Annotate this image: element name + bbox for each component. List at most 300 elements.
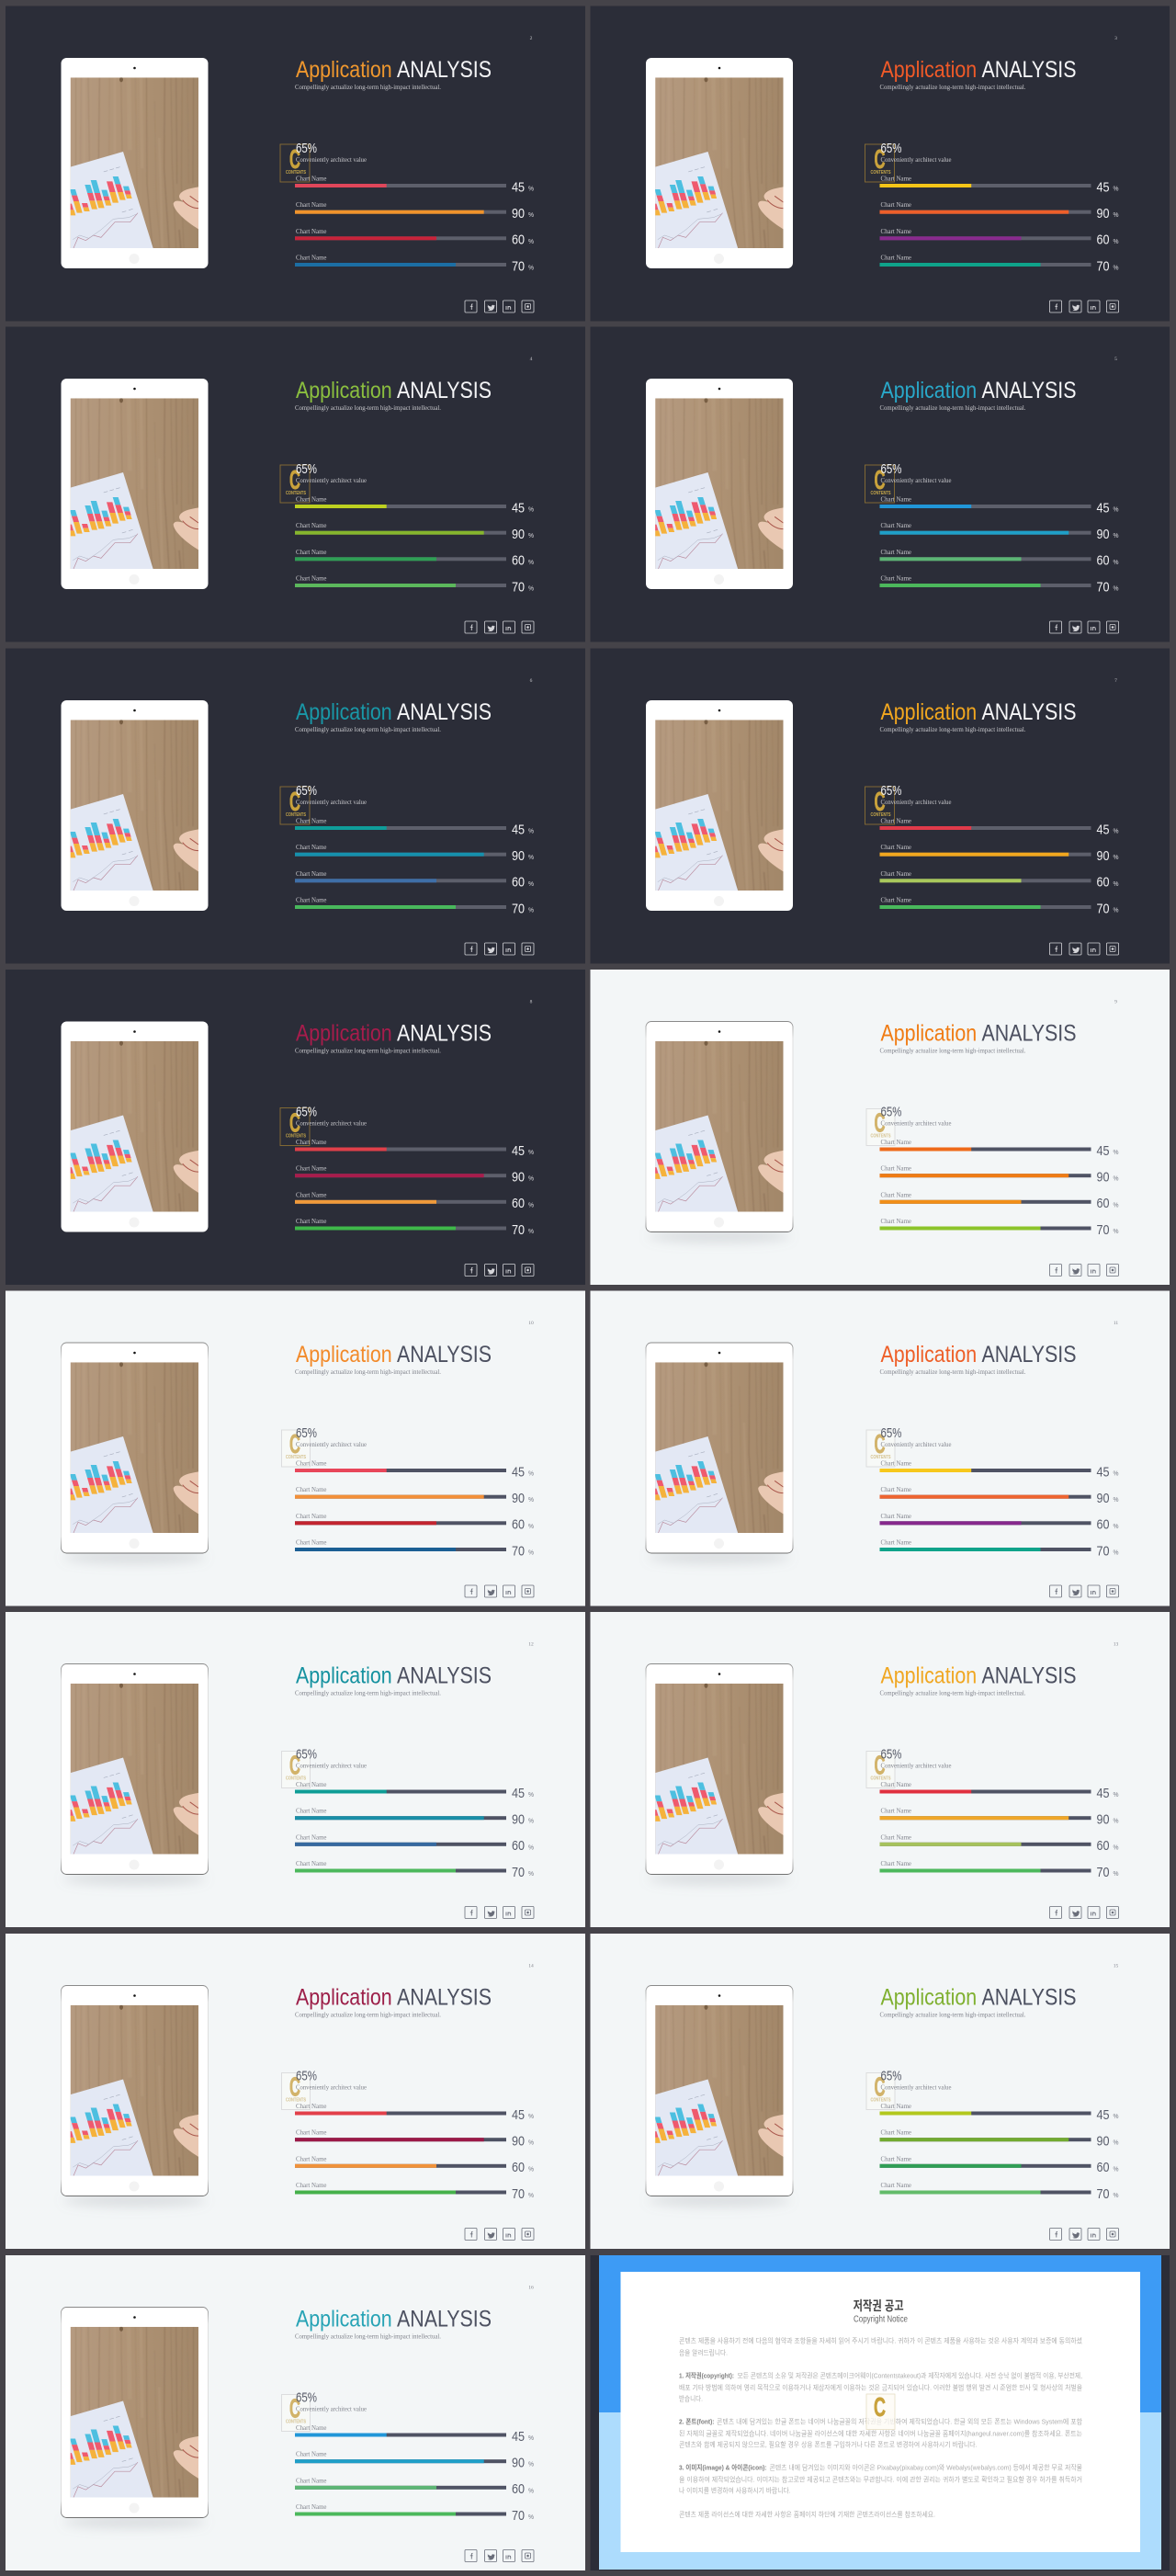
bar 90 [295, 1164, 534, 1186]
bar 90 [880, 843, 1119, 864]
subtitle: Compellingly actualize long-term high-impact intellectual. [880, 725, 1026, 733]
social icons [465, 621, 534, 633]
bar 60: 60 [1097, 553, 1110, 569]
bar chart [880, 1780, 1119, 1880]
bar 90: Chart Name [880, 521, 912, 529]
stat 65%: Conveniently architect value [296, 2082, 368, 2092]
tablet with photo [646, 58, 793, 268]
bar 90: % [1114, 1497, 1119, 1504]
paragraph: image and icon [679, 2463, 1082, 2495]
bar 60: Chart Name [880, 548, 912, 556]
bar 70 [295, 1859, 534, 1880]
bar chart [880, 2102, 1119, 2202]
bar chart [295, 494, 534, 595]
bar 60: Chart Name [296, 2476, 327, 2484]
bar 90: Chart Name [880, 1485, 912, 1493]
bar 90 [295, 2450, 534, 2470]
social icons [1049, 621, 1119, 633]
bar 60: Chart Name [296, 1833, 327, 1841]
bar 45: 45 [1097, 2107, 1110, 2123]
social icons [465, 2228, 534, 2241]
subtitle: Compellingly actualize long-term high-impact intellectual. [295, 1689, 441, 1697]
bar 70: % [1114, 586, 1119, 592]
bar 45 [880, 2102, 1119, 2123]
bar 90: Chart Name [296, 200, 327, 209]
bar 70: Chart Name [880, 254, 912, 261]
watermark logo: C [875, 2073, 886, 2103]
stat 65%: 65% [296, 2389, 317, 2406]
watermark logo: C [875, 1108, 886, 1138]
bar 45: Chart Name [296, 816, 327, 825]
title [296, 57, 492, 83]
bar 90: 90 [512, 1491, 525, 1506]
watermark logo: CONTENTS [286, 491, 306, 496]
bar 60: 60 [512, 1838, 525, 1854]
stat 65%: 65% [296, 783, 317, 799]
bar 60: % [1114, 239, 1119, 245]
slide 14: light, crimson [6, 1934, 585, 2249]
bar 60: 60 [512, 2481, 525, 2497]
stat 65%: 65% [296, 1425, 317, 1441]
bar chart [880, 816, 1119, 916]
bar chart [880, 1138, 1119, 1238]
bar 90: 90 [1097, 1812, 1110, 1827]
social icons [465, 2549, 534, 2562]
bar chart [880, 1459, 1119, 1559]
title: Application [296, 57, 392, 83]
bar 60: Chart Name [296, 227, 327, 235]
stat 65% [880, 1105, 952, 1127]
bar 70: Chart Name [296, 1217, 327, 1225]
title [880, 1342, 1077, 1367]
bar chart [295, 175, 534, 274]
bar 45: Chart Name [880, 494, 912, 504]
bar 70 [880, 1538, 1119, 1559]
watermark logo [280, 465, 310, 503]
bar 45: % [528, 829, 534, 834]
title: Application [880, 1342, 977, 1367]
watermark logo: C [289, 1430, 300, 1459]
bar 60: 60 [1097, 1517, 1110, 1533]
bar 70: 70 [1097, 1222, 1110, 1238]
bar 45: 45 [1097, 822, 1110, 837]
stat 65%: Conveniently architect value [880, 1761, 952, 1770]
bar 60 [880, 1190, 1119, 1211]
bar 60: Chart Name [880, 1190, 912, 1198]
bar 45 [295, 1459, 534, 1480]
stat 65%: Conveniently architect value [880, 2082, 952, 2092]
watermark logo: CONTENTS [286, 1776, 306, 1781]
stat 65%: Conveniently architect value [296, 1119, 368, 1127]
bar 45: % [1114, 1150, 1119, 1156]
bar 70: 70 [1097, 1865, 1110, 1880]
stat 65% [880, 141, 952, 164]
subtitle: Compellingly actualize long-term high-impact intellectual. [295, 2332, 441, 2340]
slide 9: light, orange [590, 970, 1170, 1285]
bar 60 [295, 1833, 534, 1854]
bar 90 [880, 1164, 1119, 1186]
bar 60: Chart Name [880, 227, 912, 235]
bar 70: % [528, 2514, 534, 2521]
bar 90 [295, 521, 534, 542]
bar chart [880, 175, 1119, 274]
watermark logo [866, 2393, 895, 2430]
bar 45: 45 [1097, 500, 1110, 516]
title: Application [296, 1663, 392, 1689]
bar 70 [295, 254, 534, 274]
watermark logo: CONTENTS [871, 1776, 891, 1781]
bar 60: 60 [1097, 1838, 1110, 1854]
bar 45: Chart Name [880, 175, 912, 182]
watermark logo: CONTENTS [286, 170, 306, 176]
bar chart [295, 816, 534, 916]
stat 65%: 65% [880, 783, 902, 799]
watermark logo [866, 1430, 895, 1467]
bar 90: 90 [1097, 1491, 1110, 1506]
title: Application [880, 1985, 977, 2011]
tablet with photo [646, 379, 793, 589]
bar 45: Chart Name [296, 2102, 327, 2110]
bar 60: 60 [1097, 233, 1110, 248]
watermark logo: CONTENTS [871, 2097, 891, 2103]
slide 6: dark, teal [6, 649, 585, 963]
watermark logo: C [875, 788, 886, 817]
bar 70 [295, 895, 534, 916]
bar 90: Chart Name [880, 1164, 912, 1173]
title: Application [296, 2307, 392, 2332]
bar 70: 70 [512, 1222, 525, 1238]
bar 60: % [1114, 1202, 1119, 1209]
watermark logo [280, 144, 310, 182]
title: Application [880, 378, 977, 403]
title: Application [296, 1342, 392, 1367]
bar 60: 60 [512, 875, 525, 891]
bar 60: Chart Name [880, 869, 912, 878]
watermark logo [281, 1752, 311, 1788]
social icons [1049, 1585, 1119, 1597]
paragraph: image and icon: 나 이미지를 변경하여 사용하시기 바랍니다. [679, 2486, 791, 2495]
bar 45: Chart Name [880, 2102, 912, 2110]
bar 60: Chart Name [296, 1190, 327, 1198]
title: ANALYSIS [397, 699, 492, 725]
title [296, 1020, 492, 1046]
bar 45: 45 [512, 1786, 525, 1801]
title [880, 57, 1077, 83]
bar 60: 60 [1097, 875, 1110, 891]
bar 90 [880, 200, 1119, 221]
tablet with photo [61, 58, 208, 268]
paragraph: copyright: 배포 기타 방법에 의하여 영리 목적으로 이용하거나 제삼자에게 이용하는 것은 금지되어 있습니다. 이러한 불법 행위 발견 시 준엄한 민사 및 형사상의 처벌을 [679, 2383, 1082, 2392]
page number: 10 [528, 1321, 534, 1326]
bar 45 [880, 816, 1119, 837]
panel: copyright notice slide [590, 2255, 1170, 2570]
bar 90: % [528, 1819, 534, 1825]
title [296, 2307, 492, 2332]
bar 45: % [528, 1470, 534, 1478]
social icons [465, 943, 534, 955]
bar 45 [295, 816, 534, 837]
bar 70 [295, 1217, 534, 1238]
watermark logo: C [874, 2393, 886, 2423]
social icons [465, 1265, 534, 1276]
bar 45 [880, 1780, 1119, 1801]
subtitle: Compellingly actualize long-term high-impact intellectual. [295, 2011, 441, 2018]
stat 65% [880, 783, 952, 806]
watermark logo [866, 2073, 895, 2110]
bar 70: % [1114, 908, 1119, 914]
bar 90: % [1114, 212, 1119, 219]
bar 70 [880, 573, 1119, 595]
slide 11: light, red-orange [590, 1290, 1170, 1606]
bar 45: % [1114, 1792, 1119, 1799]
paragraph: font: 2. 폰트(font): [679, 2418, 715, 2426]
bar 70: 70 [1097, 258, 1110, 274]
title: ANALYSIS [981, 378, 1077, 403]
title: ANALYSIS [981, 1663, 1077, 1689]
stat 65%: Conveniently architect value [880, 1119, 952, 1127]
bar 90: 90 [512, 527, 525, 542]
bar 45: 45 [512, 2429, 525, 2445]
title [880, 1663, 1077, 1689]
stat 65%: 65% [296, 2068, 317, 2084]
bar 70: % [528, 1229, 534, 1235]
paragraph: image and icon: 콘텐츠 내에 담겨있는 이미지와 아이콘은 Pixabay(pixabay.com)와 Webalys(webalys.com) 등에서 제공한 무료 저작물 [770, 2463, 1082, 2472]
watermark logo [865, 144, 895, 182]
bar 90: % [528, 212, 534, 219]
copyright heading: 저작권 공고 [854, 2298, 904, 2313]
bar 45: 45 [512, 1464, 525, 1480]
tablet with photo [646, 700, 793, 911]
title: ANALYSIS [397, 1663, 492, 1689]
bar 90 [880, 521, 1119, 542]
title: ANALYSIS [397, 1985, 492, 2011]
tablet with photo [61, 2307, 208, 2528]
subtitle: Compellingly actualize long-term high-impact intellectual. [880, 1367, 1026, 1376]
bar chart [295, 2102, 534, 2202]
bar 90 [295, 843, 534, 864]
stat 65%: 65% [296, 461, 317, 477]
watermark logo: C [289, 788, 300, 817]
bar 45: Chart Name [880, 816, 912, 825]
tablet with photo [61, 700, 208, 911]
tablet with photo [646, 1663, 793, 1885]
bar 70: 70 [512, 1865, 525, 1880]
bar 60 [295, 227, 534, 248]
stat 65% [296, 1425, 368, 1448]
title: Application [296, 378, 392, 403]
stat 65% [880, 1746, 952, 1770]
stat 65% [880, 2068, 952, 2092]
stat 65%: 65% [880, 1105, 902, 1119]
bar 45: Chart Name [296, 175, 327, 182]
bar 90: 90 [1097, 2134, 1110, 2149]
watermark logo: CONTENTS [286, 1134, 306, 1140]
paragraph: font: 콘텐츠와 함께 제공되지 않으므로, 필요할 경우 상용 폰트를 구입하거나 다른 폰트로 변경하여 사용하시기 바랍니다. [679, 2440, 978, 2449]
bar chart [880, 494, 1119, 595]
bar 45: % [528, 186, 534, 193]
subtitle: Compellingly actualize long-term high-impact intellectual. [880, 1046, 1026, 1055]
bar 60: % [528, 1524, 534, 1530]
stat 65%: Conveniently architect value [880, 476, 952, 484]
tablet with photo [646, 1985, 793, 2207]
stat 65%: 65% [880, 1425, 902, 1441]
stat 65%: Conveniently architect value [296, 1440, 368, 1448]
bar 45: % [528, 1150, 534, 1156]
bar 60 [295, 869, 534, 891]
bar 90: Chart Name [296, 1164, 327, 1173]
subtitle: Compellingly actualize long-term high-impact intellectual. [295, 1367, 441, 1376]
page number: 16 [528, 2285, 534, 2290]
title: ANALYSIS [397, 378, 492, 403]
watermark logo: CONTENTS [871, 170, 891, 176]
tablet with photo [61, 1663, 208, 1885]
bar 60 [295, 2476, 534, 2497]
watermark logo: C [875, 145, 886, 175]
bar 70: 70 [512, 2186, 525, 2202]
tablet with photo [646, 1343, 793, 1564]
bar 45: 45 [512, 822, 525, 837]
stat 65%: 65% [880, 461, 902, 477]
bar 90: 90 [1097, 527, 1110, 542]
page number: 2 [530, 36, 533, 41]
social icons [1049, 2228, 1119, 2241]
bar 60: % [528, 2166, 534, 2173]
bar 60 [880, 869, 1119, 891]
watermark logo: C [875, 1430, 886, 1459]
slide 4: dark, green [6, 327, 585, 641]
bar 45 [880, 175, 1119, 195]
bar 90: % [1114, 1819, 1119, 1825]
bar 70 [295, 573, 534, 595]
paragraph: font [679, 2417, 1082, 2449]
bar 90 [295, 1807, 534, 1827]
bar 70: Chart Name [880, 2181, 912, 2189]
bar 70: % [1114, 265, 1119, 272]
bar 45: 45 [1097, 1786, 1110, 1801]
bar 70: 70 [1097, 2186, 1110, 2202]
bar 45: % [1114, 2114, 1119, 2120]
page number: 12 [528, 1641, 534, 1647]
bar 70: Chart Name [296, 254, 327, 261]
title: ANALYSIS [397, 57, 492, 83]
bar 60: 60 [512, 1196, 525, 1211]
watermark logo: CONTENTS [871, 812, 891, 818]
watermark logo: C [289, 1108, 300, 1138]
bar 60 [880, 1833, 1119, 1854]
bar 70 [880, 254, 1119, 274]
title: ANALYSIS [397, 1342, 492, 1367]
watermark logo: CONTENTS [286, 2097, 306, 2103]
stat 65% [296, 2068, 368, 2092]
watermark logo: C [875, 1752, 886, 1781]
watermark logo: CONTENTS [286, 1455, 306, 1460]
title: ANALYSIS [397, 1020, 492, 1046]
title: Application [880, 1663, 977, 1689]
bar 70: Chart Name [296, 2181, 327, 2189]
slide 12: light, teal [6, 1612, 585, 1927]
bar 45: % [1114, 507, 1119, 513]
bar 60: % [528, 2488, 534, 2494]
bar 70: 70 [512, 1543, 525, 1559]
page number: 6 [530, 678, 533, 684]
stat 65%: Conveniently architect value [296, 476, 368, 484]
bar 60 [295, 1512, 534, 1533]
watermark logo: C [289, 2395, 300, 2424]
title: ANALYSIS [981, 1020, 1077, 1046]
bar 70: % [1114, 1229, 1119, 1235]
bar 90: Chart Name [296, 1485, 327, 1493]
bar 45: 45 [512, 179, 525, 195]
subtitle: Compellingly actualize long-term high-impact intellectual. [880, 2011, 1026, 2018]
tablet with photo [646, 1022, 793, 1243]
bar 45: Chart Name [296, 1138, 327, 1146]
paragraph: font: 된 자체의 글꼴로 제작되었습니다. 네이버 나눔글꼴 라이선스에 대한 자세한 사항은 네이버 나눔글꼴 홈페이지(hangeul.naver.com)를 참조하세요. 폰트는 [679, 2429, 1082, 2438]
bar 45 [880, 1459, 1119, 1480]
bar 70: Chart Name [296, 1859, 327, 1867]
bar 60: 60 [512, 553, 525, 569]
subtitle: Compellingly actualize long-term high-impact intellectual. [295, 83, 441, 91]
intro paragraph: 음을 알려드립니다. [679, 2348, 728, 2357]
slide 7: dark, amber [590, 649, 1170, 963]
bar 70 [880, 1859, 1119, 1880]
bar 60: % [1114, 1524, 1119, 1530]
slide 15: light, green [590, 1934, 1170, 2249]
bar 45: Chart Name [296, 494, 327, 504]
bar 70: Chart Name [296, 895, 327, 904]
watermark logo: C [875, 466, 886, 495]
title: Application [296, 1020, 392, 1046]
paragraph: image and icon: 을 이용하여 제작되었습니다. 이미지는 참고로만 제공되고 콘텐츠와는 무관합니다. 이에 관한 권리는 귀하가 별도로 확인하고 필요할 경우 허가를 취득하거 [679, 2475, 1082, 2484]
title [296, 378, 492, 403]
page number: 7 [1114, 678, 1117, 684]
slide 16: light, blue [6, 2255, 585, 2570]
bar 70: % [528, 586, 534, 592]
social icons [465, 301, 534, 312]
slide 8: dark, crimson [6, 970, 585, 1285]
stat 65%: 65% [296, 1746, 317, 1763]
bar 90: % [528, 533, 534, 539]
bar 60: % [1114, 560, 1119, 566]
watermark logo: C [289, 1752, 300, 1781]
bar 45: % [1114, 1470, 1119, 1478]
bar 60 [295, 1190, 534, 1211]
social icons [1049, 1265, 1119, 1276]
bar 45: % [1114, 186, 1119, 193]
bar 45: % [528, 2435, 534, 2442]
subtitle: Compellingly actualize long-term high-impact intellectual. [295, 1046, 441, 1055]
watermark logo [281, 2073, 311, 2110]
bar 70: % [1114, 1549, 1119, 1557]
bar 45 [295, 494, 534, 516]
bar 60: Chart Name [296, 2154, 327, 2162]
bar 90: % [1114, 1176, 1119, 1183]
bar 70: % [528, 265, 534, 272]
stat 65%: Conveniently architect value [880, 155, 952, 164]
watermark logo: CONTENTS [871, 491, 891, 496]
slide 10: light, orange [6, 1290, 585, 1606]
stat 65%: Conveniently architect value [296, 155, 368, 164]
bar 90: 90 [1097, 848, 1110, 864]
subtitle: Compellingly actualize long-term high-impact intellectual. [880, 83, 1026, 91]
bar 60: 60 [512, 2160, 525, 2175]
bar 70: 70 [512, 2508, 525, 2524]
bar 90 [880, 1807, 1119, 1827]
bar 90: % [528, 855, 534, 861]
bar 70: % [528, 908, 534, 914]
bar 45: % [528, 507, 534, 513]
title: ANALYSIS [397, 2307, 492, 2332]
social icons [1049, 301, 1119, 312]
